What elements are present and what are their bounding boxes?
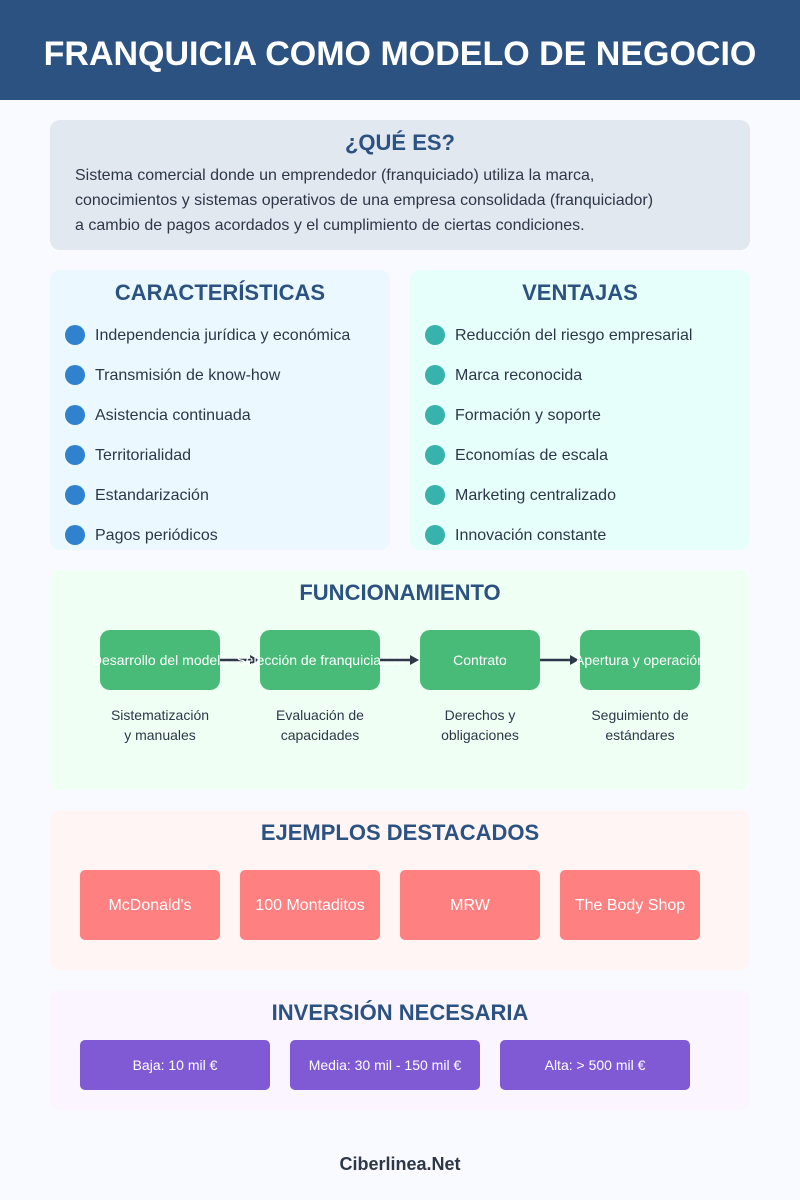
panel: funcionamiento: Selección de franquiciados [236,652,404,668]
panel: funcionamiento: y manuales [124,727,196,743]
panel: ventajas: VENTAJAS [522,280,638,305]
panel: características: Independencia jurídica y económica [95,327,350,344]
panel: ejemplos destacados [50,810,750,970]
panel: funcionamiento: Contrato [453,652,507,668]
panel: ventajas: Innovación constante [455,527,606,544]
panel: funcionamiento: estándares [605,727,675,743]
panel: ventajas: Marca reconocida [455,367,582,384]
panel: funcionamiento [50,570,750,790]
panel: inversión necesaria: Baja: 10 mil € [133,1057,218,1073]
panel: funcionamiento: Seguimiento de [591,707,689,723]
panel: características: Territorialidad [95,447,191,464]
panel: funcionamiento: Apertura y operación [575,652,705,668]
title banner [0,0,800,100]
panel: funcionamiento: capacidades [281,727,359,743]
panel: características: Transmisión de know-how [95,367,281,384]
panel: funcionamiento: Derechos y [445,707,515,723]
panel: inversión necesaria: INVERSIÓN NECESARIA [272,1000,528,1025]
panel: características: Estandarización [95,487,209,504]
panel: qué es: ¿QUÉ ES? [345,130,455,155]
panel: ventajas: Formación y soporte [455,407,601,424]
panel: ejemplos destacados: EJEMPLOS DESTACADOS [261,820,539,845]
panel: características: Pagos periódicos [95,527,218,544]
panel: ventajas [410,270,750,550]
panel: inversión necesaria: Alta: > 500 mil € [545,1057,646,1073]
panel: funcionamiento: Evaluación de [276,707,364,723]
panel: inversión necesaria: Media: 30 mil - 150 mil € [309,1057,461,1073]
panel: ventajas: Marketing centralizado [455,487,616,504]
panel: inversión necesaria [50,990,750,1110]
panel: qué es: conocimientos y sistemas operativos de una empresa consolidada (franquiciador) [75,192,653,209]
panel: qué es: Sistema comercial donde un emprendedor (franquiciado) utiliza la marca, [75,167,594,184]
panel: características [50,270,390,550]
panel: ejemplos destacados: The Body Shop [575,897,685,914]
panel: ventajas: Reducción del riesgo empresarial [455,327,692,344]
panel: funcionamiento: FUNCIONAMIENTO [299,580,501,605]
panel: qué es: a cambio de pagos acordados y el cumplimiento de ciertas condiciones. [75,217,585,234]
panel: funcionamiento: Desarrollo del modelo [92,652,228,668]
panel: ejemplos destacados: McDonald's [108,897,192,914]
panel: qué es [50,120,750,250]
panel: ventajas: Economías de escala [455,447,608,464]
panel: funcionamiento: Sistematización [111,707,209,723]
panel: ejemplos destacados: MRW [450,897,491,914]
panel: características: Asistencia continuada [95,407,251,424]
panel: características: CARACTERÍSTICAS [115,280,325,305]
panel: ejemplos destacados: 100 Montaditos [255,897,365,914]
footer credit: Ciberlinea.Net [339,1154,461,1174]
panel: funcionamiento: obligaciones [441,727,519,743]
title banner: FRANQUICIA COMO MODELO DE NEGOCIO [44,35,756,73]
